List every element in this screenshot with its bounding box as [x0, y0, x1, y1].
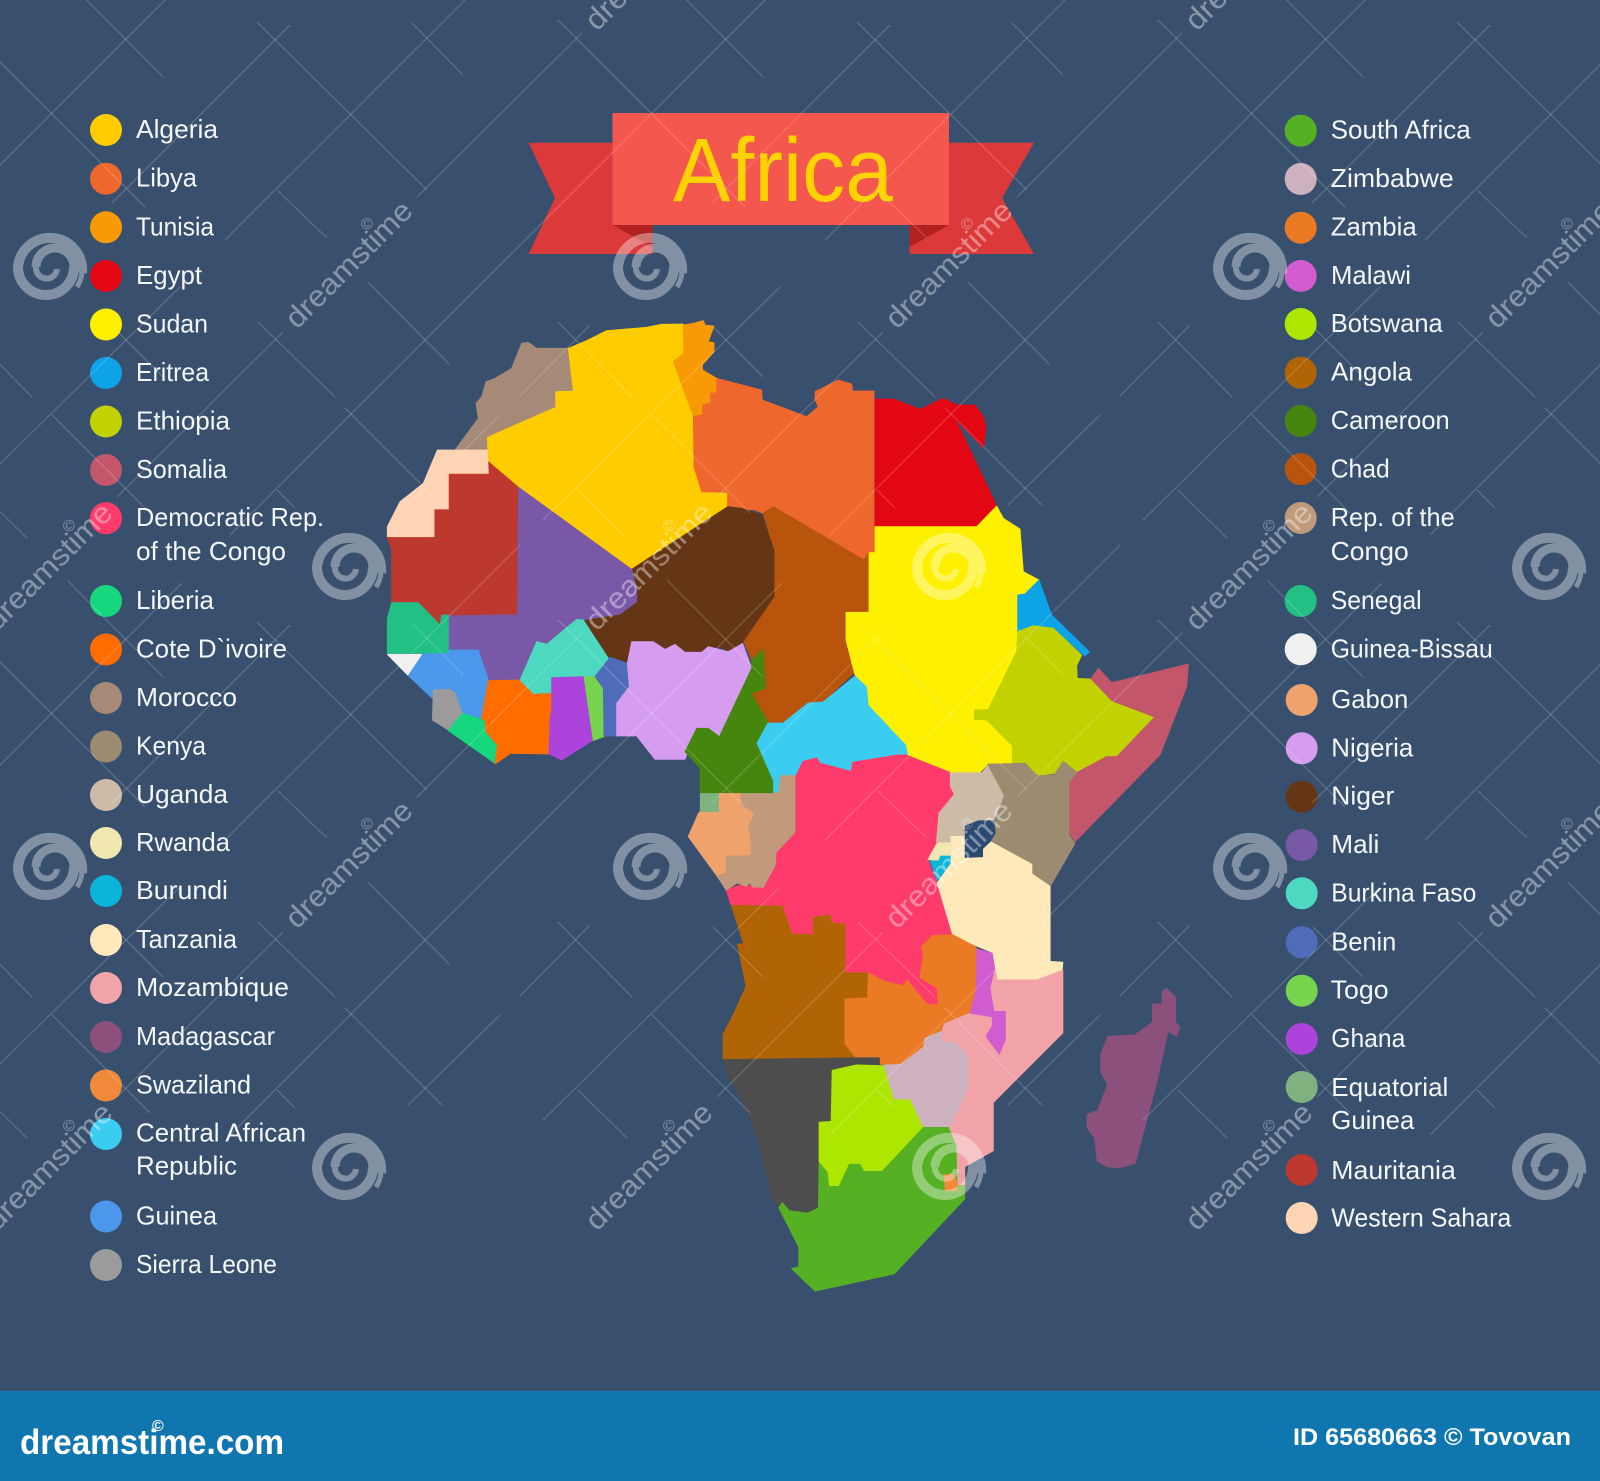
legend item: Mali: Mali [1331, 829, 1379, 859]
legend item: Kenya: Kenya [136, 730, 207, 760]
legend item: Zimbabwe [1285, 163, 1454, 195]
legend item: Angola: Angola [1331, 357, 1413, 387]
watermark overlay: dreamstime [579, 496, 719, 637]
legend item: Somalia: Somalia [136, 454, 228, 484]
country: Kenya [988, 761, 1077, 886]
legend item: Sierra Leone [90, 1249, 277, 1281]
country: Rep. of the Congo [717, 776, 795, 890]
legend item: Burkina Faso: Burkina Faso [1331, 877, 1476, 907]
legend item: Mozambique: Mozambique [136, 972, 289, 1002]
legend item: Mauritania: Mauritania [1331, 1155, 1456, 1185]
legend item: Algeria [90, 114, 219, 146]
legend item: Rep. of the Congo: Congo [1331, 536, 1409, 566]
legend item: Egypt [90, 260, 203, 292]
watermark overlay: © [63, 1118, 75, 1135]
country: Zambia [845, 935, 976, 1064]
legend item: Cote D`ivoire: Cote D`ivoire [136, 634, 287, 664]
legend item: Zambia: Zambia [1331, 212, 1417, 242]
country: Cameroon [685, 649, 773, 793]
legend item: Senegal: Senegal [1331, 585, 1422, 615]
watermark overlay: © [1263, 1118, 1275, 1135]
country: Malawi [970, 949, 1005, 1054]
legend item: Gabon: Gabon [1331, 684, 1408, 714]
legend item: Tunisia [90, 211, 214, 243]
watermark overlay: © [663, 1118, 675, 1135]
legend item: Botswana [1285, 308, 1443, 340]
legend item: Niger: Niger [1331, 781, 1395, 811]
legend: left column [90, 114, 324, 1281]
watermark overlay: © [1561, 216, 1573, 233]
title banner [529, 113, 1034, 254]
country: Democratic Rep. of the Congo [726, 755, 954, 1005]
legend item: Angola [1285, 357, 1413, 389]
legend item: Democratic Rep. of the Congo: of the Congo [136, 536, 286, 566]
legend item: Guinea-Bissau: Guinea-Bissau [1331, 633, 1493, 663]
legend item: Nigeria: Nigeria [1331, 732, 1414, 762]
legend item: South Africa: South Africa [1331, 115, 1471, 145]
legend item: Democratic Rep. of the Congo: Democratic Rep. [136, 502, 324, 532]
legend item: Uganda: Uganda [136, 779, 229, 809]
legend item: Equatorial Guinea: Guinea [1331, 1105, 1415, 1135]
country: Western Sahara [387, 450, 488, 537]
country: Egypt [875, 398, 997, 527]
legend item: Guinea [90, 1200, 218, 1232]
legend item: Ghana: Ghana [1331, 1023, 1406, 1053]
country: Mauritania [387, 462, 518, 625]
legend item: Uganda [90, 779, 229, 811]
country: Cote d'Ivoire [482, 680, 556, 764]
country: Burundi [930, 856, 950, 880]
legend item: Mali [1286, 829, 1379, 861]
legend item: Algeria: Algeria [136, 114, 219, 144]
country: Morocco [455, 342, 573, 450]
country: Burkina Faso [520, 619, 608, 693]
country: Eritrea [1018, 580, 1089, 656]
watermark overlay: dreamstime [579, 1096, 719, 1237]
country: Mali [448, 487, 637, 680]
legend item: Togo [1286, 975, 1389, 1007]
legend item: Zimbabwe: Zimbabwe [1331, 163, 1454, 193]
legend: right column [1285, 115, 1512, 1234]
legend item: Egypt: Egypt [136, 260, 203, 290]
legend item: Botswana: Botswana [1331, 308, 1443, 338]
legend item: Central African Republic: Central African [136, 1118, 306, 1148]
country: Tanzania [937, 836, 1063, 980]
legend item: Niger [1286, 781, 1395, 813]
legend item: Ghana [1286, 1023, 1406, 1055]
legend item: Sierra Leone: Sierra Leone [136, 1249, 277, 1279]
legend item: Swaziland [90, 1070, 251, 1102]
legend item: Madagascar [90, 1021, 275, 1053]
watermark overlay: © [361, 216, 373, 233]
country: Tunisia [673, 321, 717, 416]
legend item: Eritrea: Eritrea [136, 357, 210, 387]
country: Swaziland [944, 1174, 958, 1191]
watermark overlay: dreamstime [1179, 496, 1319, 637]
legend item: Equatorial Guinea [1286, 1071, 1448, 1135]
legend item: Tanzania [90, 924, 238, 956]
country: Botswana [819, 1065, 923, 1186]
country: Central African Republic [757, 676, 908, 793]
country: Rwanda [928, 843, 950, 861]
legend item: Liberia [90, 585, 215, 617]
legend item: Libya: Libya [136, 163, 198, 193]
legend item: Morocco [90, 682, 237, 714]
country: Sudan [846, 506, 1039, 772]
legend item: Sudan [90, 308, 208, 340]
legend item: Cameroon: Cameroon [1331, 405, 1450, 435]
country: Guinea-Bissau [387, 654, 423, 676]
lake Victoria [965, 820, 996, 858]
watermark overlay: © [663, 518, 675, 535]
legend item: Central African Republic [90, 1118, 306, 1180]
legend item: Gabon [1286, 684, 1408, 716]
country: Guinea [408, 650, 488, 718]
legend item: Benin: Benin [1331, 926, 1396, 956]
legend item: Somalia [90, 454, 228, 486]
legend item: Burundi [90, 875, 228, 907]
legend item: Burundi: Burundi [136, 875, 228, 905]
footer image id and credit: ID 65680663 © Tovovan [1293, 1424, 1571, 1451]
country: Libya [693, 378, 874, 560]
country: Angola [723, 905, 868, 1059]
legend item: Guinea: Guinea [136, 1200, 218, 1230]
legend item: Senegal [1285, 585, 1422, 617]
country: Liberia [448, 713, 497, 763]
country: Gabon [688, 794, 754, 876]
legend item: Rep. of the Congo: Rep. of the [1331, 502, 1455, 532]
watermark overlay: dreamstime [879, 194, 1019, 335]
legend item: Burkina Faso [1286, 877, 1476, 909]
legend item: Sudan: Sudan [136, 308, 208, 338]
legend item: Rep. of the Congo [1285, 502, 1455, 566]
legend item: Togo: Togo [1331, 975, 1389, 1005]
footer logo: © [152, 1418, 164, 1435]
country: Ghana [549, 677, 593, 760]
legend item: Cameroon [1285, 405, 1450, 437]
legend item: Benin [1286, 926, 1396, 958]
watermark overlay: © [961, 816, 973, 833]
legend item: Malawi [1285, 260, 1411, 292]
legend item: Madagascar: Madagascar [136, 1021, 275, 1051]
country: Niger [583, 507, 774, 663]
legend item: Rwanda [90, 827, 231, 859]
legend item: Liberia: Liberia [136, 585, 215, 615]
country: Ethiopia [974, 626, 1153, 776]
watermark overlay: dreamstime [279, 794, 419, 935]
country: Nigeria [617, 642, 752, 759]
legend item: Kenya [90, 730, 207, 762]
country: Togo [584, 677, 604, 741]
legend item: Morocco: Morocco [136, 682, 237, 712]
country: Zimbabwe [884, 1031, 969, 1127]
country: Algeria [487, 324, 728, 569]
legend item: Western Sahara: Western Sahara [1331, 1202, 1512, 1232]
watermark overlay: © [63, 518, 75, 535]
legend item: Eritrea [90, 357, 210, 389]
legend item: Chad [1285, 453, 1390, 485]
legend item: Tunisia: Tunisia [136, 211, 214, 241]
footer logo: dreamstime.com [20, 1423, 284, 1462]
title text: Africa [673, 121, 894, 221]
country: Somalia [1068, 664, 1188, 842]
country: Chad [743, 507, 869, 723]
legend item: Libya [90, 163, 198, 195]
country: Benin [595, 657, 629, 736]
watermark overlay: © [961, 216, 973, 233]
country: Mozambique [942, 969, 1063, 1185]
legend item: Swaziland: Swaziland [136, 1070, 251, 1100]
country: Madagascar [1087, 988, 1180, 1168]
legend item: Mauritania [1286, 1154, 1456, 1186]
country: Namibia [723, 1058, 879, 1213]
footer bar [0, 1391, 1600, 1481]
legend item: Central African Republic: Republic [136, 1150, 237, 1180]
country: Sierra Leone [432, 689, 462, 730]
legend item: Tanzania: Tanzania [136, 924, 238, 954]
map of Africa [387, 321, 1188, 1291]
legend item: Ethiopia: Ethiopia [136, 406, 231, 436]
watermark overlay: dreamstime [279, 194, 419, 335]
watermark overlay: dreamstime [879, 794, 1019, 935]
legend item: Zambia [1285, 212, 1417, 244]
country: Senegal [387, 603, 448, 653]
country: South Africa [779, 1127, 965, 1291]
legend item: Equatorial Guinea: Equatorial [1331, 1072, 1448, 1102]
country: Uganda [937, 765, 1004, 842]
legend item: Nigeria [1286, 732, 1414, 764]
watermark overlay: © [1263, 518, 1275, 535]
legend item: Chad: Chad [1331, 453, 1390, 483]
legend item: Democratic Rep. of the Congo [90, 502, 324, 566]
legend item: Malawi: Malawi [1331, 260, 1411, 290]
legend item: Rwanda: Rwanda [136, 827, 231, 857]
watermark overlay: dreamstime [1179, 1096, 1319, 1237]
watermark overlay: © [1561, 816, 1573, 833]
legend item: Ethiopia [90, 406, 231, 438]
watermark overlay: © [361, 816, 373, 833]
country: Equatorial Guinea [700, 794, 719, 811]
